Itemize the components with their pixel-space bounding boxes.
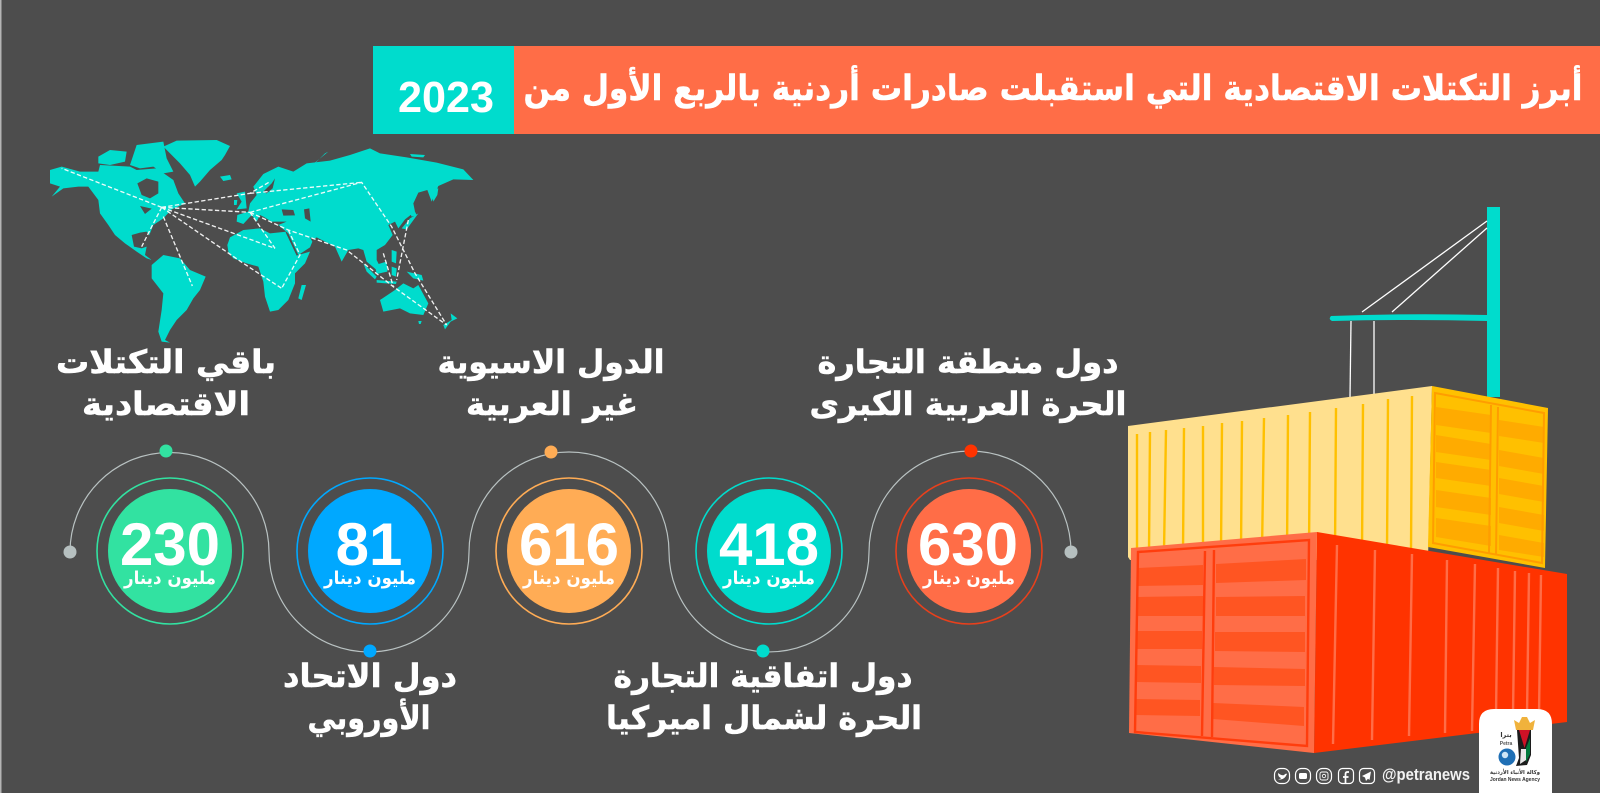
stat: 616 non-Arab Asian countries: غير العربية xyxy=(466,385,638,423)
icon: twitter xyxy=(1274,768,1290,784)
stat: 630 Greater Arab Free Trade Area: الحرة العربية الكبرى xyxy=(810,385,1126,423)
logo card xyxy=(1479,709,1552,793)
stat: 630 Greater Arab Free Trade Area xyxy=(810,343,1126,624)
stat: 81 European Union: مليون دينار xyxy=(323,568,416,589)
stat: 616 non-Arab Asian countries: الدول الاسيوية xyxy=(438,343,664,381)
world map xyxy=(50,140,473,343)
stat: 230 other blocs: الاقتصادية xyxy=(82,385,250,423)
stat: 81 European Union: الأوروبي xyxy=(308,698,430,737)
stat: 616 non-Arab Asian countries xyxy=(438,343,664,624)
stat: 630 Greater Arab Free Trade Area: مليون دينار xyxy=(922,568,1015,589)
stat: 418 North America FTA: الحرة لشمال اميركيا xyxy=(606,699,922,737)
stat: 81 European Union xyxy=(283,478,457,737)
stat: 230 other blocs xyxy=(56,343,276,624)
icon: instagram xyxy=(1316,768,1332,784)
flag xyxy=(1516,730,1531,766)
icon: facebook xyxy=(1338,768,1354,784)
crown xyxy=(1514,717,1535,730)
logo card: Petra xyxy=(1500,741,1512,747)
stat: 230 other blocs: 230 xyxy=(120,511,220,578)
logo card: Jordan News Agency xyxy=(1490,777,1541,783)
stat: 616 non-Arab Asian countries: مليون دينار xyxy=(522,568,615,589)
icon: telegram xyxy=(1360,768,1374,784)
stat: 418 North America FTA: 418 xyxy=(719,511,819,578)
stat: 418 North America FTA xyxy=(606,478,922,737)
stat: 418 North America FTA: دول اتفاقية التجارة xyxy=(614,657,912,695)
globe xyxy=(1498,748,1516,766)
year: 2023 xyxy=(398,73,494,122)
crane xyxy=(1330,207,1500,398)
stat: 616 non-Arab Asian countries: 616 xyxy=(519,511,619,578)
connecting wave line xyxy=(70,451,1071,652)
stat: 81 European Union: 81 xyxy=(336,511,402,578)
yellow container xyxy=(1128,386,1548,568)
title banner xyxy=(373,46,1600,134)
logo text: بترا xyxy=(1500,731,1512,739)
social handles xyxy=(1274,765,1470,784)
logo card: وكالة الأنباء الأردنية xyxy=(1490,768,1541,776)
handle: @petranews xyxy=(1382,765,1470,784)
route lines xyxy=(62,168,447,325)
stat: 630 Greater Arab Free Trade Area: دول منطقة التجارة xyxy=(818,343,1118,381)
stat: 630 Greater Arab Free Trade Area: 630 xyxy=(918,511,1018,578)
end dots xyxy=(64,546,1078,558)
stat: 230 other blocs: باقي التكتلات xyxy=(56,343,276,381)
stat: 230 other blocs: مليون دينار xyxy=(123,568,216,589)
stat: 81 European Union: دول الاتحاد xyxy=(283,657,457,695)
red container xyxy=(1129,532,1567,753)
stat: 418 North America FTA: مليون دينار xyxy=(722,568,815,589)
icon: youtube xyxy=(1296,768,1310,784)
